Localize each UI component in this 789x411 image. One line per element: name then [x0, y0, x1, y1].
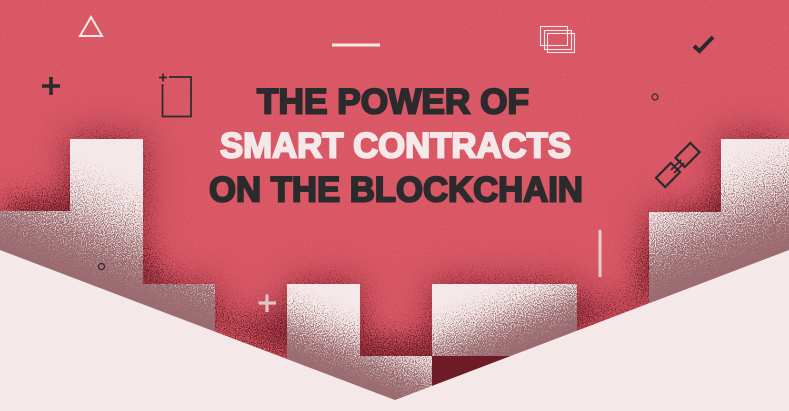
title line 2: SMART CONTRACTS: [220, 126, 571, 166]
icon: vertical dash: [598, 230, 602, 277]
block: right staircase: [649, 139, 789, 303]
icon: stacked rectangles: [540, 26, 574, 52]
icon: small circle right: [652, 94, 658, 100]
block: wide centre-right: [432, 284, 577, 356]
block: centre step: [287, 284, 432, 400]
soft red haze under the shadows: [0, 130, 789, 405]
title line 1: THE POWER OF: [257, 82, 529, 122]
icon: small circle left: [98, 264, 104, 270]
icon: triangle: [80, 17, 102, 36]
title: [209, 82, 583, 210]
block: left staircase: [0, 139, 215, 332]
dark grainy shadows behind the blocks: [0, 139, 789, 400]
icon: chain link: [656, 143, 700, 187]
block: dark maroon square: [432, 356, 512, 387]
icon: pale plus: [258, 294, 276, 312]
icon: rectangle with plus: [159, 74, 191, 116]
title line 3: ON THE BLOCKCHAIN: [209, 170, 583, 210]
icon: horizontal dash: [332, 44, 380, 46]
icon: dark plus: [42, 77, 60, 95]
icon: check mark: [694, 37, 713, 51]
foreground pale V panel: [0, 250, 789, 411]
